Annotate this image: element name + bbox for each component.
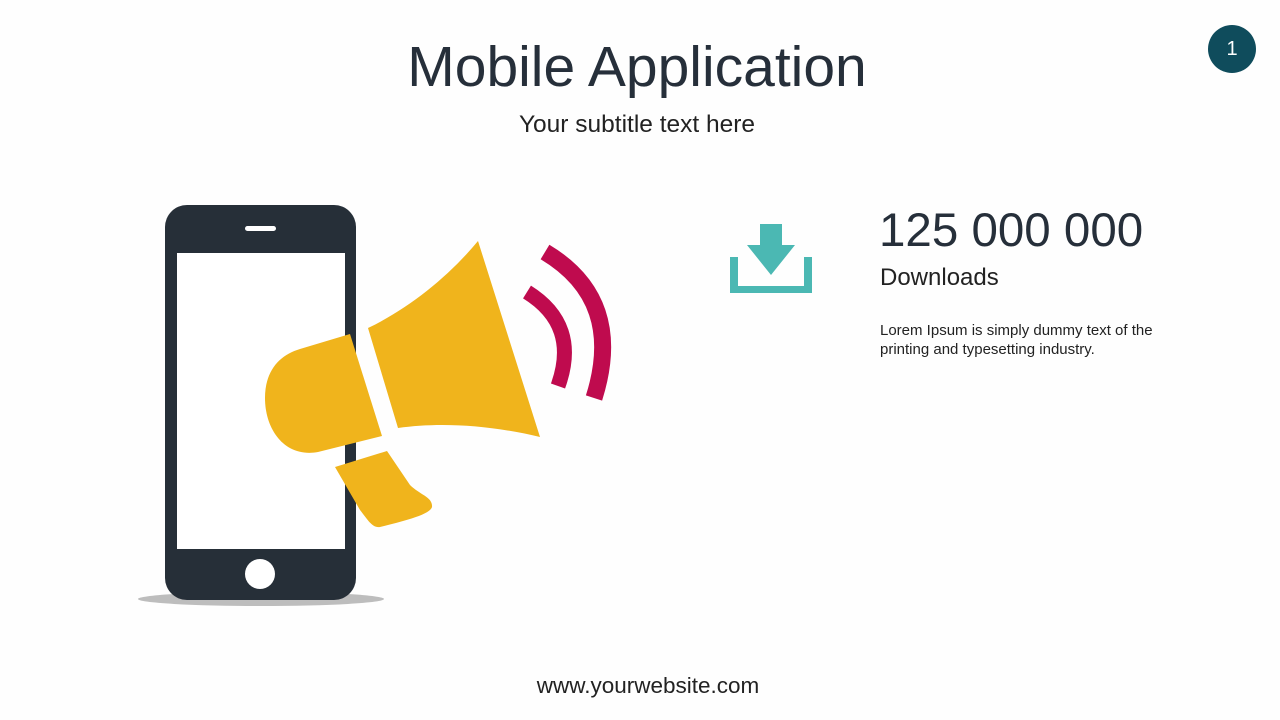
title: Mobile Application	[407, 35, 867, 99]
subtitle: Your subtitle text here	[519, 111, 755, 138]
stat: description	[880, 322, 1153, 358]
footer: www.yourwebsite.com	[537, 673, 759, 698]
megaphone	[265, 241, 540, 527]
phone shadow	[138, 592, 384, 606]
icon: download	[730, 224, 812, 293]
sound waves	[527, 252, 603, 398]
page number badge	[1208, 25, 1256, 73]
stat: number: 125 000 000	[879, 204, 1143, 257]
illustration: phone with megaphone	[138, 205, 612, 606]
phone	[165, 205, 356, 600]
stat: description: Lorem Ipsum is simply dummy text of the	[880, 322, 1153, 339]
page number badge: 1	[1226, 38, 1238, 60]
stat: label: Downloads	[880, 264, 999, 291]
stat: description: printing and typesetting industry.	[880, 341, 1095, 358]
